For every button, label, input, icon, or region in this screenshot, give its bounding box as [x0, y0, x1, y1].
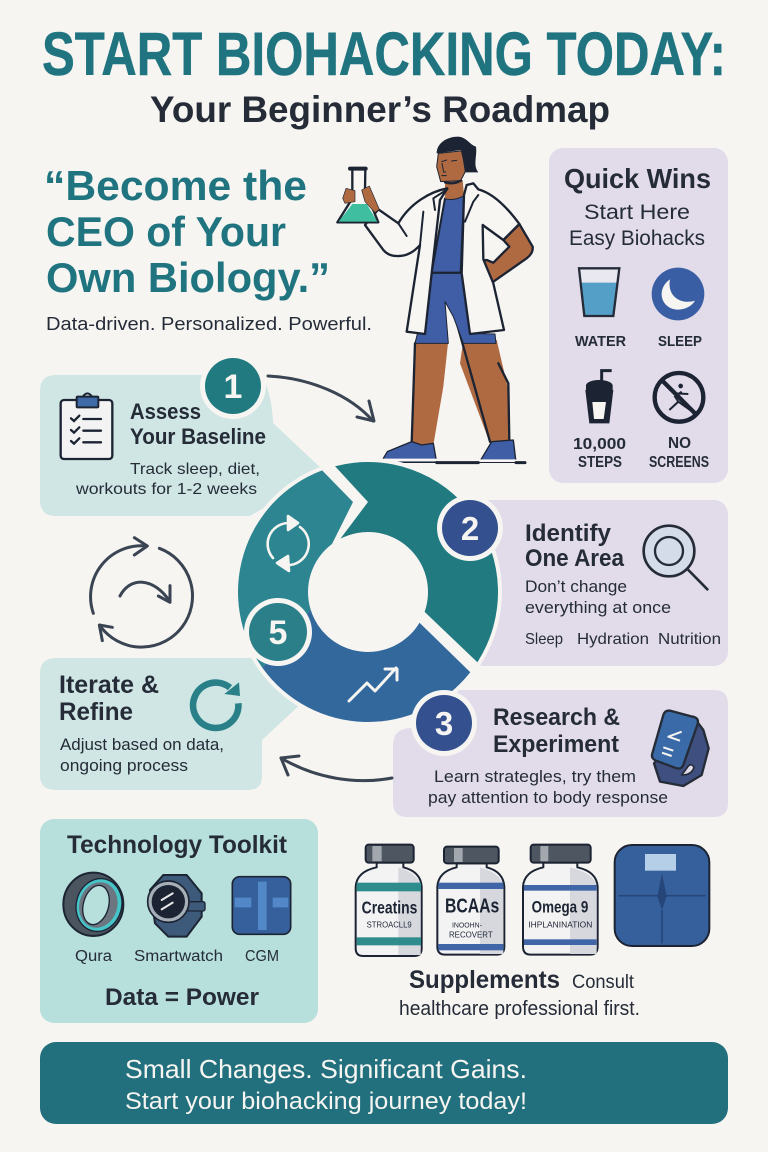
smart scale — [615, 845, 709, 946]
banner: call to action: Start your biohacking journey today! — [125, 1088, 527, 1115]
panel: step 1 assess: Assess — [130, 399, 201, 424]
badge: step 3 — [411, 690, 477, 756]
supplement bottle: creatine — [356, 845, 422, 956]
segment: light teal — [238, 470, 353, 668]
icon: no screens — [655, 373, 703, 422]
panel: step 5 iterate: Iterate & — [59, 671, 159, 699]
supplement bottle: bcaas: INOOHN- — [452, 920, 483, 929]
badge: step 2 — [437, 495, 503, 561]
panel: technology toolkit: CGM — [245, 948, 279, 965]
icon: moon — [652, 268, 704, 320]
icon: refresh ring — [193, 682, 240, 728]
badge: step 1 — [200, 353, 266, 419]
panel: technology toolkit: Data = Power — [105, 984, 259, 1011]
panel: step 3 research: Research & — [493, 704, 620, 731]
icon: magnifier — [644, 526, 707, 589]
label: no screens — [649, 435, 709, 471]
panel: step 3 research: pay attention to body response — [428, 789, 668, 807]
label: steps: 10,000 — [573, 436, 626, 453]
supplements note — [399, 966, 640, 1020]
quote heading: Own Biology.” — [46, 254, 330, 301]
arrow: step 1 to person — [268, 376, 374, 421]
cycle donut — [234, 458, 502, 726]
badge: step 2: 2 — [461, 510, 479, 547]
panel: step 2 identify — [470, 500, 728, 666]
icon: clipboard — [61, 393, 112, 459]
icon: smart ring — [63, 873, 128, 937]
icon: smartwatch — [148, 875, 205, 937]
supplements note: Consult — [572, 972, 635, 993]
panel: technology toolkit: Qura — [75, 948, 112, 965]
segment: blue — [262, 610, 470, 722]
label: sleep: SLEEP — [658, 333, 702, 350]
label: steps: STEPS — [578, 454, 622, 471]
label: steps — [573, 436, 626, 471]
supplements note: Supplements — [409, 966, 560, 994]
subtitle: Your Beginner’s Roadmap — [150, 89, 610, 130]
scientist illustration — [337, 137, 533, 463]
quote heading: CEO of Your — [46, 208, 286, 255]
panel: step 5 iterate: Adjust based on data, — [60, 736, 224, 754]
supplement bottle: omega: Omega 9 — [532, 897, 588, 916]
label: water: WATER — [575, 333, 626, 350]
panel: step 1 assess: Track sleep, diet, — [130, 461, 260, 478]
panel: step 2 identify: everything at once — [525, 598, 671, 617]
segment: dark teal — [335, 462, 498, 662]
panel: quick wins: Easy Biohacks — [569, 227, 705, 250]
panel: technology toolkit: Technology Toolkit — [67, 831, 288, 859]
banner: call to action — [40, 1042, 728, 1124]
arrow: step 3 to step 5 — [281, 756, 392, 781]
panel: technology toolkit — [40, 819, 318, 1023]
icon: step cup — [585, 371, 613, 423]
icon: water glass — [579, 268, 619, 316]
icon: circular arrows — [91, 538, 193, 647]
banner: call to action: Small Changes. Significant Gains. — [125, 1054, 527, 1084]
supplement bottle: bcaas — [437, 847, 504, 955]
panel: quick wins: Quick Wins — [564, 163, 711, 194]
panel: quick wins — [549, 148, 728, 483]
panel: step 2 identify: One Area — [525, 545, 625, 572]
supplement bottle: creatine: Creatins — [362, 897, 417, 917]
panel: step 1 assess — [40, 375, 325, 516]
label: no screens: NO — [668, 435, 691, 452]
supplement bottle: bcaas: BCAAs — [445, 896, 499, 918]
panel: quick wins: Start Here — [584, 201, 690, 224]
panel: step 2 identify: Sleep — [525, 631, 563, 648]
icon: refresh arrows — [268, 516, 309, 571]
icon: cgm sensor — [232, 877, 291, 934]
panel: step 5 iterate: ongoing process — [60, 757, 188, 775]
icon: trend arrow — [349, 668, 397, 701]
panel: technology toolkit: Smartwatch — [134, 948, 223, 965]
panel: step 2 identify: Don’t change — [525, 577, 627, 596]
panel: step 1 assess: workouts for 1-2 weeks — [75, 481, 257, 498]
supplement bottle: creatine: STROACLL9 — [367, 920, 412, 929]
badge: step 3: 3 — [435, 705, 453, 742]
label: no screens: SCREENS — [649, 454, 709, 471]
icon: fitness band — [652, 711, 709, 786]
supplement bottle: omega — [523, 845, 598, 955]
panel: step 1 assess: Your Baseline — [130, 424, 266, 449]
panel: step 2 identify: Identify — [525, 520, 612, 547]
supplements note: healthcare professional first. — [399, 998, 640, 1020]
badge: step 1: 1 — [224, 368, 242, 406]
panel: step 3 research — [393, 690, 728, 817]
panel: step 5 iterate — [40, 658, 305, 790]
panel: step 3 research: Experiment — [493, 731, 619, 758]
donut gap ring — [234, 458, 502, 726]
tagline: Data-driven. Personalized. Powerful. — [46, 314, 372, 334]
panel: step 3 research: Learn strategles, try them — [434, 768, 636, 786]
panel: step 2 identify: Hydration — [577, 631, 649, 648]
supplement bottle: bcaas: RECOVERT — [449, 930, 493, 939]
quote heading: “Become the — [44, 162, 307, 209]
badge: step 5 — [244, 598, 312, 666]
panel: step 5 iterate: Refine — [59, 698, 133, 726]
quote heading — [44, 162, 330, 301]
badge: step 5: 5 — [269, 614, 287, 652]
panel: step 2 identify: Nutrition — [658, 631, 721, 648]
supplement bottle: omega: IHPLANINATION — [528, 921, 593, 930]
